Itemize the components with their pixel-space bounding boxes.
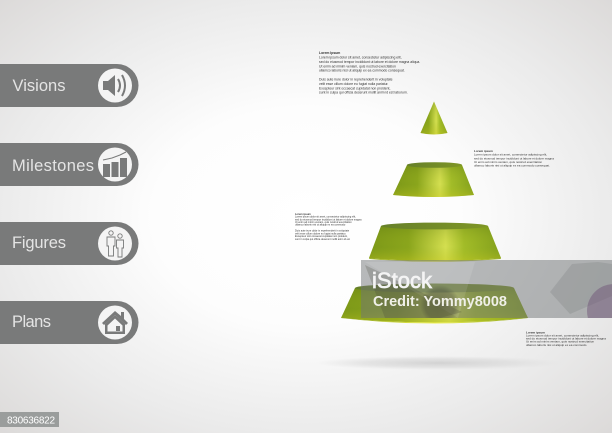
text block: top lorem ipsum: Duis aute irure dolor in reprehenderit in voluptate — [319, 78, 393, 82]
text block: third tier: Excepteur sint occaecat cupidatat non proident, — [295, 235, 348, 238]
text block: top lorem ipsum: Ut enim ad minim veniam, quis nostrud exercitation — [319, 64, 396, 68]
watermark banner — [361, 260, 612, 318]
icon: speaker — [103, 75, 125, 96]
text block: top lorem ipsum: Excepteur sint occaecat cupidatat non proident, — [319, 86, 390, 90]
icon: two people — [107, 231, 124, 257]
text block: fourth tier: ullamco laboris nisi ut aliquip ex ea commodo — [526, 343, 587, 347]
text block: third tier: Lorem ipsum dolor sit amet, consectetur adipiscing elit, — [295, 216, 356, 219]
text block: top lorem ipsum: sed do eiusmod tempor incididunt ut labore et dolore magna aliqua. — [319, 60, 420, 64]
text block: third tier: sunt in culpa qui officia deserunt mollit anim id est — [295, 238, 350, 241]
ground shadow — [315, 356, 565, 370]
text block: top lorem ipsum: Lorem Ipsum — [319, 51, 340, 55]
text block: second tier: Lorem ipsum dolor sit amet, consectetur adipiscing elit, — [474, 153, 547, 157]
text block: fourth tier: Ut enim ad minim veniam, quis nostrud exercitation — [526, 340, 594, 344]
menu pill: Plans — [0, 301, 138, 344]
text block: top lorem ipsum: Lorem ipsum dolor sit amet, consectetur adipiscing elit, — [319, 56, 402, 60]
text block: third tier: Duis aute irure dolor in reprehenderit in voluptate — [295, 230, 350, 233]
label: Figures: Figures — [12, 234, 66, 252]
menu pill: Visions — [0, 64, 138, 107]
image id badge — [0, 412, 59, 427]
label: Visions: Visions — [12, 77, 66, 95]
text block: third tier: Ut enim ad minim veniam, quis nostrud exercitation — [295, 221, 352, 224]
text block: third tier: velit esse cillum dolore eu fugiat nulla pariatur. — [295, 232, 346, 235]
text block: fourth tier: Lorem ipsum — [526, 330, 545, 334]
text block: third tier — [295, 213, 362, 241]
text block: second tier: ullamco laboris nisi ut aliquip ex ea commodo consequat. — [474, 164, 550, 168]
text block: third tier: Lorem ipsum — [295, 213, 311, 216]
text block: fourth tier: Lorem ipsum dolor sit amet, consectetur adipiscing elit, — [526, 334, 599, 338]
text block: top lorem ipsum: sunt in culpa qui officia deserunt mollit anim id est laborum. — [319, 91, 408, 95]
menu pill: Milestones — [0, 143, 138, 186]
text block: fourth tier — [526, 330, 606, 347]
text block: second tier — [474, 149, 554, 168]
icon: bar chart — [103, 152, 127, 177]
text block: top lorem ipsum: ullamco laboris nisi ut aliquip ex ea commodo consequat. — [319, 69, 405, 73]
watermark: iStock: iStock — [372, 268, 433, 293]
text block: second tier: Lorem ipsum — [474, 149, 493, 153]
text block: second tier: sed do eiusmod tempor incididunt ut labore et dolore magna — [474, 156, 554, 160]
text block: top lorem ipsum: velit esse cillum dolore eu fugiat nulla pariatur. — [319, 82, 388, 86]
menu pill: Figures — [0, 222, 138, 265]
label: Plans: Plans — [12, 313, 51, 331]
pyramid tier 3 — [369, 223, 501, 262]
text block: third tier: ullamco laboris nisi ut aliquip ex ea commodo — [295, 224, 346, 227]
text block: third tier: sed do eiusmod tempor incididunt ut labore et dolore magna — [295, 218, 362, 221]
label: Milestones: Milestones — [12, 157, 94, 175]
text block: second tier: Ut enim ad minim veniam, quis nostrud exercitation — [474, 160, 542, 164]
watermark: credit: Credit: Yommy8008 — [373, 294, 507, 310]
image id badge: 830636822 — [7, 416, 55, 426]
pyramid tier 1: cone — [420, 102, 448, 134]
text block: fourth tier: sed do eiusmod tempor incididunt ut labore et dolore magna — [526, 337, 606, 341]
pyramid tier 4 — [341, 284, 528, 324]
icon: house — [102, 311, 128, 334]
pyramid tier 2 — [393, 162, 474, 197]
text block: top lorem ipsum — [319, 51, 420, 95]
